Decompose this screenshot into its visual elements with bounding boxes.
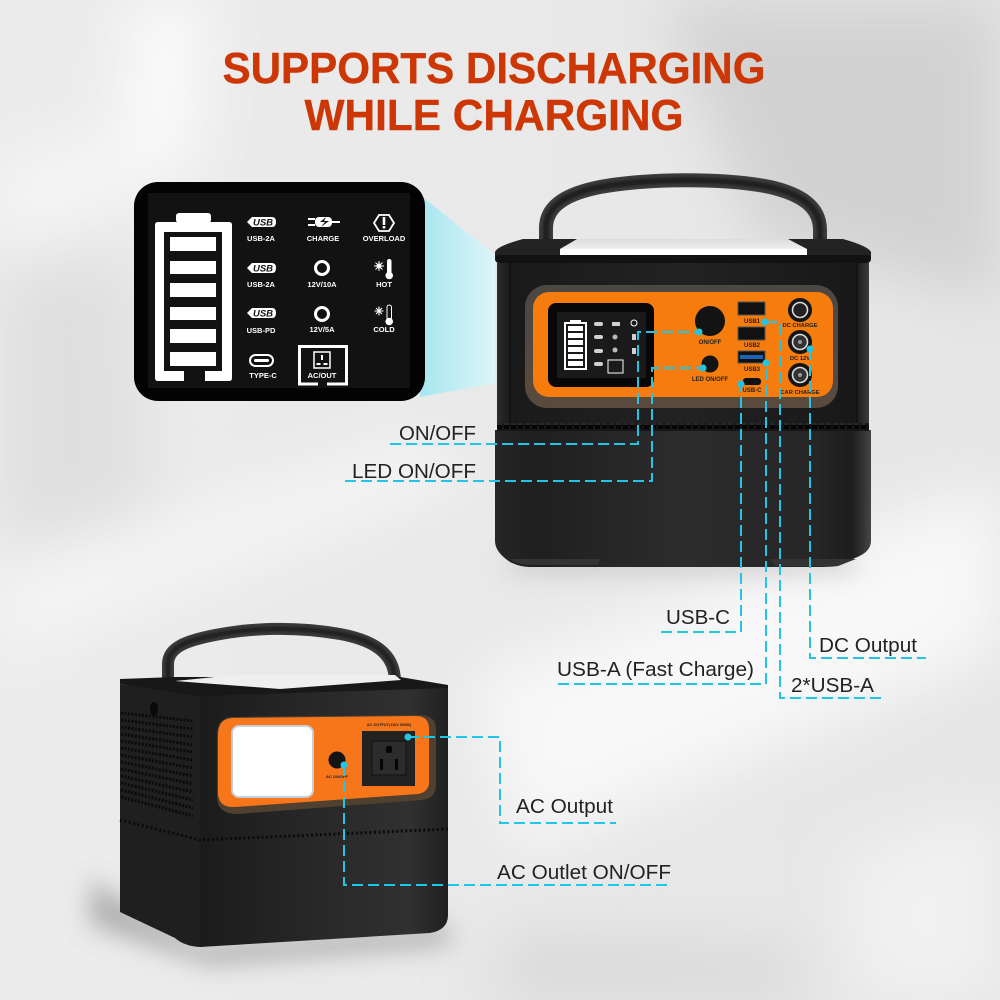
left power station: back view bbox=[120, 629, 448, 947]
usb-a fast charge line bbox=[558, 363, 766, 684]
labels bbox=[352, 423, 917, 884]
seam band bbox=[497, 423, 869, 431]
connector dots bbox=[340, 318, 814, 768]
icon: type-c: TYPE-C bbox=[249, 371, 277, 380]
orange panel bbox=[217, 715, 436, 814]
leader lines bbox=[344, 322, 926, 885]
icon: battery bbox=[155, 213, 232, 381]
icon: usb 2 bbox=[247, 263, 276, 289]
shadows bbox=[90, 560, 855, 965]
speaker grille bbox=[121, 713, 193, 816]
ac outlet on/off line bbox=[344, 765, 671, 885]
icon: cold bbox=[373, 305, 395, 334]
icon: ac out bbox=[300, 346, 346, 384]
icon: usb pd: USB bbox=[253, 308, 273, 320]
ac on/off button bbox=[328, 752, 346, 768]
icon: overload bbox=[363, 215, 406, 243]
front panel bbox=[200, 688, 448, 947]
labels: USB-A (Fast Charge) bbox=[557, 659, 754, 681]
icon: charge: CHARGE bbox=[307, 234, 339, 243]
orange control panel bbox=[525, 285, 838, 408]
icon: charge bbox=[307, 217, 340, 243]
2*usb-a line bbox=[765, 322, 881, 698]
small display bbox=[548, 303, 654, 387]
lamp bbox=[232, 726, 313, 797]
led on/off line bbox=[345, 368, 703, 481]
icon: 12v/5a bbox=[309, 308, 335, 334]
on/off line bbox=[390, 332, 699, 444]
top lid bbox=[495, 239, 871, 263]
right power station: front view: USB1 bbox=[744, 319, 761, 325]
side port bbox=[150, 702, 158, 716]
icon: usb pd bbox=[247, 308, 276, 335]
labels: ON/OFF bbox=[399, 423, 476, 445]
right power station: front view: DC CHARGE bbox=[782, 323, 818, 329]
icon: usb 2: USB bbox=[253, 264, 273, 274]
right power station: front view bbox=[495, 180, 871, 567]
upper body bbox=[497, 263, 869, 423]
ac label: AC OUTPUT(110V 600W) bbox=[367, 723, 412, 727]
usb-c line bbox=[661, 384, 741, 632]
title bbox=[222, 44, 766, 140]
icon: hot bbox=[374, 259, 393, 289]
icon: type-c bbox=[249, 355, 277, 380]
side panel bbox=[120, 684, 203, 947]
on/off button bbox=[695, 306, 725, 336]
labels: USB-C bbox=[666, 607, 730, 629]
labels: AC Outlet ON/OFF bbox=[497, 862, 671, 884]
icon: usb 1: USB bbox=[253, 218, 273, 228]
zoom beam from screen to callout bbox=[420, 195, 495, 397]
title: WHILE CHARGING bbox=[304, 91, 684, 140]
right power station: front view: DC 12V bbox=[790, 356, 810, 362]
handle bbox=[168, 629, 395, 682]
handle bbox=[546, 180, 820, 250]
icon: ac out: AC/OUT bbox=[308, 371, 337, 380]
callout: display icons bbox=[134, 182, 425, 401]
right power station: front view: USB2 bbox=[744, 343, 761, 349]
usb ports bbox=[738, 302, 765, 315]
icon: usb 1 bbox=[247, 217, 276, 243]
right power station: front view: USB-C bbox=[742, 388, 762, 394]
ac socket bbox=[362, 731, 415, 786]
dc ports bbox=[788, 298, 812, 322]
labels: AC Output bbox=[516, 796, 613, 818]
left power station: back view: AC ON/OFF bbox=[326, 774, 349, 779]
labels: 2*USB-A bbox=[791, 675, 875, 697]
icon: overload: OVERLOAD bbox=[363, 234, 406, 243]
lower body bbox=[495, 430, 871, 567]
right power station: front view: CAR CHARGE bbox=[780, 390, 820, 396]
icon: usb pd: USB-PD bbox=[247, 326, 276, 335]
icon: 12v/5a: 12V/5A bbox=[309, 325, 335, 334]
right power station: front view: USB3 bbox=[744, 367, 761, 373]
right power station: front view: ON/OFF bbox=[699, 340, 722, 346]
ac output line bbox=[408, 737, 616, 823]
led button bbox=[702, 356, 718, 372]
labels: LED ON/OFF bbox=[352, 461, 476, 483]
icon: cold: COLD bbox=[373, 325, 395, 334]
icon: 12v/10a bbox=[307, 262, 337, 289]
title: SUPPORTS DISCHARGING bbox=[222, 44, 766, 93]
top lid bbox=[120, 677, 448, 698]
dc output line bbox=[810, 349, 926, 658]
icon: usb 1: USB-2A bbox=[247, 234, 276, 243]
labels: DC Output bbox=[819, 635, 917, 657]
icon: usb 2: USB-2A bbox=[247, 280, 276, 289]
seam bbox=[120, 820, 448, 840]
icon: 12v/10a: 12V/10A bbox=[307, 280, 337, 289]
right power station: front view: LED ON/OFF bbox=[692, 377, 728, 383]
icon: hot: HOT bbox=[376, 280, 392, 289]
